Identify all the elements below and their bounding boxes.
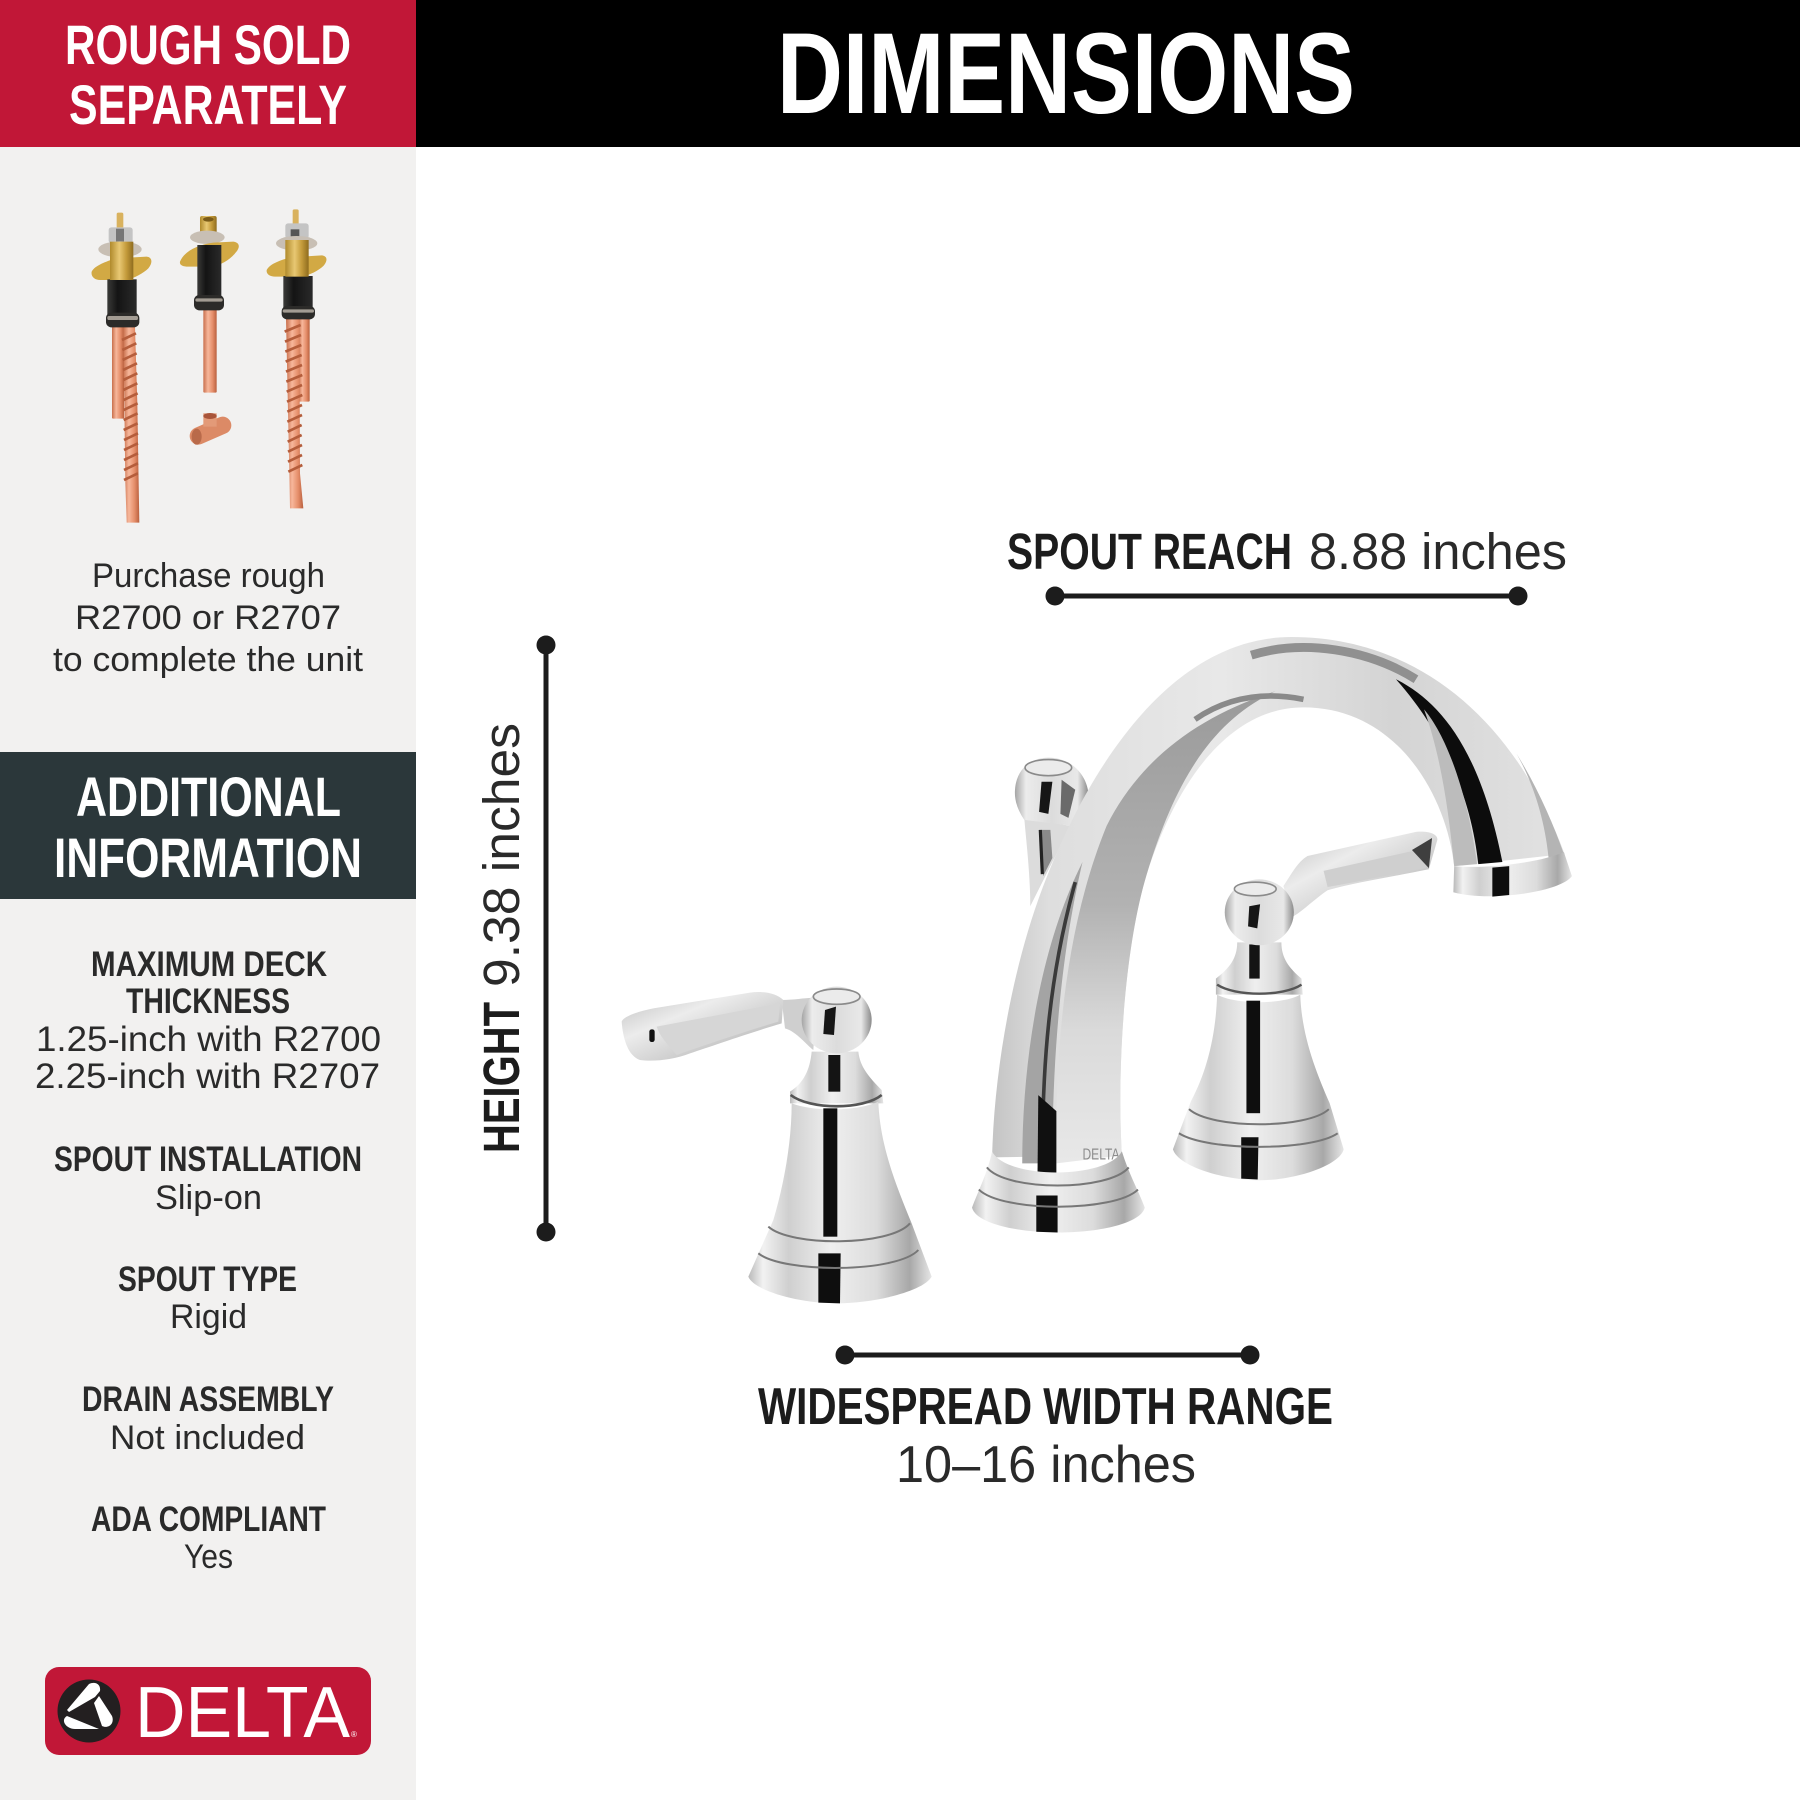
spec: spout type: SPOUT TYPE bbox=[118, 1260, 297, 1299]
logo: delta bbox=[45, 1667, 371, 1755]
title banner: dimensions: DIMENSIONS bbox=[777, 10, 1355, 138]
dimension: height: 9.38 inches bbox=[473, 723, 530, 987]
dimension: widespread width range bbox=[758, 1346, 1333, 1494]
left handle lever bbox=[622, 992, 817, 1061]
logo: delta: ® bbox=[351, 1730, 357, 1739]
right valve bbox=[267, 209, 327, 508]
dimension: spout reach bbox=[1007, 523, 1567, 606]
spec: ada compliant: ADA COMPLIANT bbox=[91, 1500, 326, 1539]
pull-up lever post bbox=[1015, 758, 1089, 906]
spec: drain assembly bbox=[82, 1380, 334, 1457]
text: purchase rough note: to complete the unit bbox=[53, 641, 364, 679]
spout base bbox=[972, 1151, 1145, 1233]
dimension: spout reach: SPOUT REACH bbox=[1007, 523, 1292, 580]
spec: spout installation bbox=[54, 1140, 362, 1217]
spec: ada compliant bbox=[91, 1500, 326, 1576]
right handle body bbox=[1173, 879, 1344, 1180]
spec: drain assembly: Not included bbox=[110, 1419, 305, 1457]
banner: rough sold separately bbox=[0, 0, 416, 147]
dimension: spout reach: 8.88 inches bbox=[1309, 523, 1567, 580]
spout arch: DELTA bbox=[1083, 1145, 1120, 1163]
spec: ada compliant: Yes bbox=[184, 1538, 233, 1576]
dimension: height: HEIGHT bbox=[473, 1002, 530, 1153]
text: purchase rough note: Purchase rough bbox=[92, 557, 325, 595]
left valve bbox=[92, 213, 151, 523]
spout aerator collar bbox=[1453, 852, 1572, 897]
image: rough valve kit bbox=[92, 209, 327, 523]
copper tee fitting bbox=[192, 413, 223, 445]
title banner: dimensions bbox=[416, 0, 1800, 147]
spec: spout installation: SPOUT INSTALLATION bbox=[54, 1140, 362, 1179]
spec: maximum deck thickness: MAXIMUM DECK bbox=[91, 945, 327, 984]
spec: maximum deck thickness bbox=[35, 945, 381, 1096]
faucet spout and right handle bbox=[972, 637, 1572, 1233]
text: purchase rough note: R2700 or R2707 bbox=[75, 599, 341, 637]
heading: additional information bbox=[0, 752, 416, 899]
spec: spout type: Rigid bbox=[170, 1298, 247, 1336]
text: purchase rough note bbox=[53, 557, 364, 679]
spec: maximum deck thickness: 1.25-inch with R2700 bbox=[36, 1020, 381, 1059]
dimension: height bbox=[473, 636, 556, 1242]
heading: additional information: ADDITIONAL bbox=[76, 765, 341, 828]
panel: sidebar background bbox=[0, 147, 416, 1800]
middle valve bbox=[180, 216, 239, 393]
left handle bbox=[622, 987, 932, 1303]
spec: spout type bbox=[118, 1260, 297, 1336]
spec: drain assembly: DRAIN ASSEMBLY bbox=[82, 1380, 334, 1419]
spec: maximum deck thickness: THICKNESS bbox=[126, 982, 290, 1021]
spec: spout installation: Slip-on bbox=[155, 1179, 262, 1217]
dimension: widespread width range: WIDESPREAD WIDTH RANGE bbox=[758, 1378, 1333, 1436]
spout arch bbox=[992, 637, 1565, 1175]
left handle body bbox=[748, 987, 932, 1303]
banner: rough sold separately: ROUGH SOLD bbox=[65, 13, 351, 76]
spec: maximum deck thickness: 2.25-inch with R2707 bbox=[35, 1057, 380, 1096]
dimension: widespread width range: 10–16 inches bbox=[896, 1436, 1196, 1494]
logo: delta: DELTA bbox=[135, 1673, 350, 1753]
banner: rough sold separately: SEPARATELY bbox=[69, 73, 347, 136]
heading: additional information: INFORMATION bbox=[54, 826, 362, 889]
right handle lever bbox=[1283, 832, 1437, 916]
image: chrome faucet bbox=[622, 637, 1572, 1303]
